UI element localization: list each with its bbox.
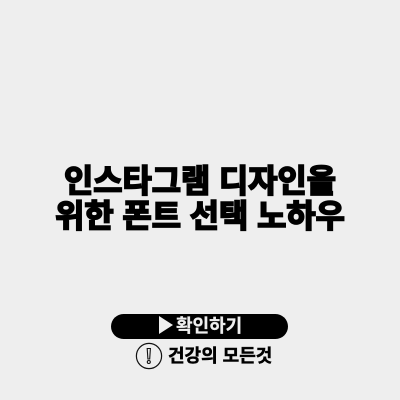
icon: exclamation circle — [136, 342, 162, 370]
title line 1: 인스타그램 디자인을 — [64, 163, 336, 199]
brand text: 건강의 모든것 — [168, 346, 272, 366]
title — [55, 163, 345, 234]
button: confirm — [111, 314, 288, 339]
icon: play triangle — [159, 316, 173, 334]
button label: 확인하기 — [176, 316, 242, 336]
title line 2: 위한 폰트 선택 노하우 — [55, 198, 345, 234]
